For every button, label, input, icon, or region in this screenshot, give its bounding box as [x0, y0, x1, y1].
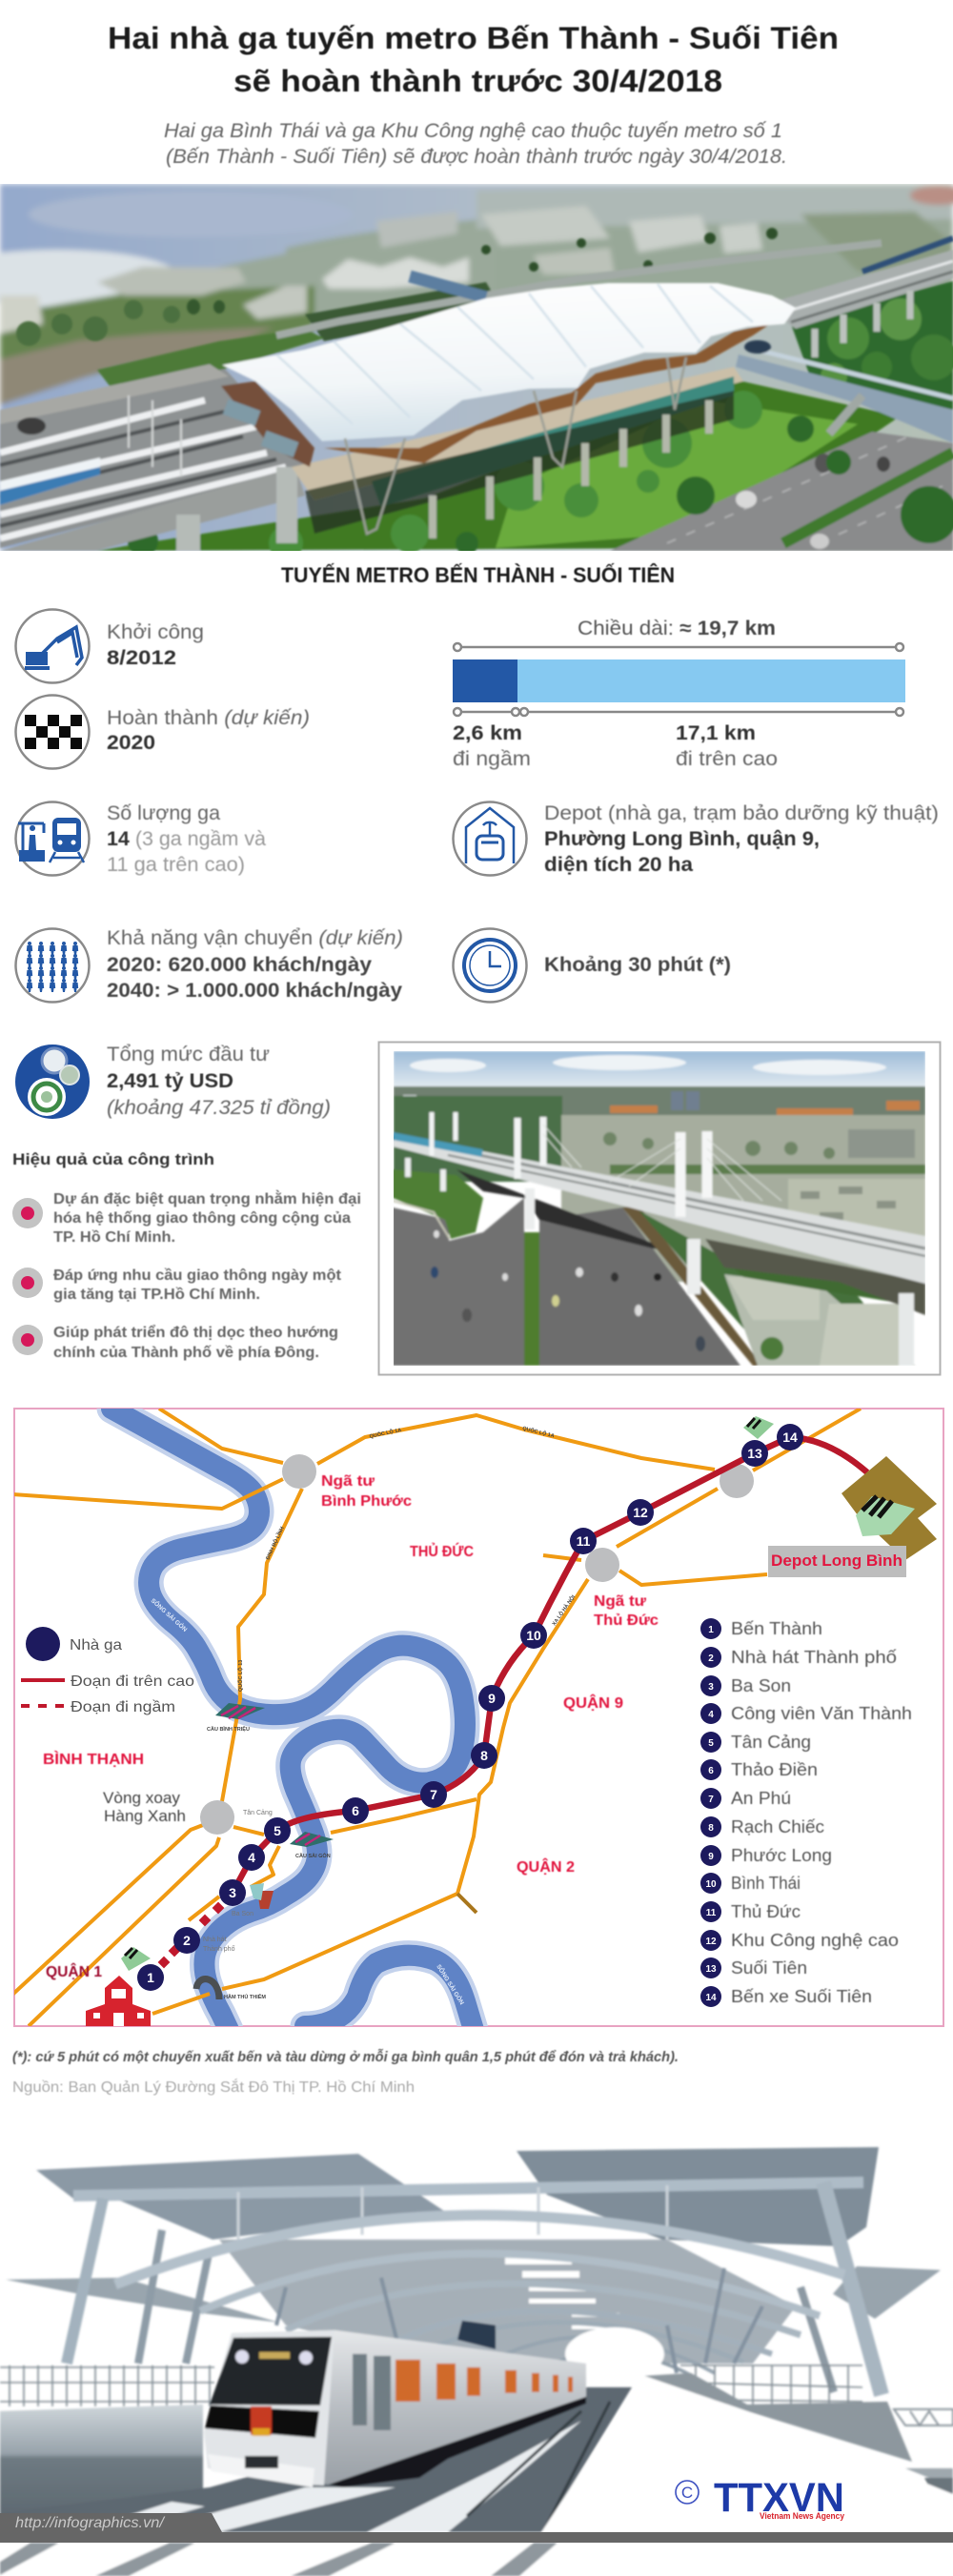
stations: 3: [229, 1885, 236, 1900]
station side labels: Nhà hát: [203, 1937, 227, 1943]
text: start date: 8/2012: [107, 647, 176, 669]
map frame: [14, 1409, 943, 2026]
source url tab: http://infographics.vn/: [15, 2515, 166, 2531]
metro line elevated: [233, 1437, 867, 1893]
station list: 4: [708, 1710, 714, 1720]
label: underground: đi ngầm: [453, 748, 531, 770]
bridge labels: CẦU BÌNH TRIỆU: [207, 1725, 250, 1733]
bridges: [215, 1703, 334, 1847]
text: investment: [107, 1044, 331, 1119]
train side: [310, 2330, 586, 2485]
road name labels: QUỐC LỘ 1A: [522, 1424, 556, 1439]
station list: Bình Thái: [731, 1874, 801, 1893]
station side labels: Tân Cảng: [243, 1810, 273, 1816]
viaduct deck: [393, 1134, 925, 1284]
length bar chart: [453, 618, 905, 770]
benefit 1: [12, 1189, 361, 1246]
label: underground: 2,6 km: [453, 722, 522, 744]
bullet: [12, 1325, 43, 1355]
route map: [12, 1409, 943, 2030]
stations: 6: [352, 1803, 359, 1818]
stations: [137, 1424, 803, 1991]
canopy roof panels: [36, 2154, 444, 2240]
stations: 9: [488, 1691, 496, 1706]
text: capacity: [107, 927, 403, 1002]
station side labels: Ba Son: [232, 1911, 253, 1917]
text: station count: Số lượng ga: [107, 802, 220, 824]
roads: [12, 1409, 861, 2026]
far curved viaduct: [276, 243, 882, 335]
text: start date: Khởi công: [107, 621, 204, 643]
subtitle: Hai ga Bình Thái và ga Khu Công nghệ cao thuộc tuyến metro số 1: [164, 120, 782, 142]
river labels: SÔNG SÀI GÒN: [435, 1962, 467, 2006]
station list: [700, 1618, 912, 2007]
text: depot: Depot (nhà ga, trạm bảo dưỡng kỹ thuật): [544, 802, 939, 824]
text: investment: 2,491 tỷ USD: [107, 1070, 233, 1092]
district and junction labels: THỦ ĐỨC: [410, 1542, 474, 1560]
icon: train near Quận 1: [121, 1947, 151, 1971]
metro line underground: [158, 1902, 224, 1968]
text: gia tăng tại TP.Hồ Chí Minh.: [53, 1287, 260, 1303]
left tracks viaduct: [0, 369, 314, 548]
station list: Bến Thành: [731, 1619, 822, 1638]
stat: total investment: [15, 1044, 331, 1119]
bridge labels: [207, 1725, 331, 2000]
stations: 5: [274, 1823, 281, 1838]
text: completion date: Hoàn thành (dự kiến): [107, 707, 310, 729]
text: capacity: 2020: 620.000 khách/ngày: [107, 954, 372, 976]
river labels: SÔNG SÀI GÒN: [150, 1596, 190, 1633]
photo frame: elevated viaduct over highway: [379, 1043, 940, 1374]
river: Sài Gòn: [112, 1409, 474, 2030]
station list: An Phú: [731, 1789, 791, 1808]
station list: 13: [705, 1964, 717, 1975]
road name labels: [236, 1424, 577, 1692]
station list: 3: [708, 1682, 714, 1693]
station list: 1: [708, 1625, 714, 1635]
road name labels: ĐINH BỘ LĨNH: [264, 1525, 286, 1561]
text: [53, 1189, 361, 1246]
white track streaks: [76, 2421, 581, 2532]
text: [53, 1268, 342, 1303]
source url tab: [0, 2513, 222, 2532]
platform right, white: [541, 2376, 953, 2532]
district and junction labels: QUẬN 1: [46, 1962, 102, 1980]
TTXVN logo: C: [681, 2484, 693, 2502]
section heading: TUYẾN METRO BẾN THÀNH - SUỐI TIÊN: [281, 562, 675, 587]
title: sẽ hoàn thành trước 30/4/2018: [233, 64, 722, 98]
stat: completion: [15, 696, 310, 768]
source: Nguồn: Ban Quản Lý Đường Sắt Đô Thị TP. Hồ Chí Minh: [12, 2078, 415, 2096]
road name labels: QUỐC LỘ 1A: [369, 1426, 402, 1440]
station list: 11: [706, 1908, 717, 1918]
station list: Nhà hát Thành phố: [731, 1648, 897, 1667]
icon: clock: [454, 928, 526, 1003]
text: Đáp ứng nhu cầu giao thông ngày một: [53, 1268, 342, 1284]
title: [108, 21, 839, 98]
district and junction labels: Ngã tư: [321, 1473, 375, 1490]
station list: 6: [708, 1766, 714, 1776]
text: Dự án đặc biệt quan trọng nhằm hiện đại: [53, 1189, 361, 1207]
stations: 2: [183, 1933, 191, 1948]
stations: 14: [782, 1430, 798, 1445]
label: elevated: đi trên cao: [676, 748, 778, 770]
icon: Ba Son shipyard: [250, 1883, 274, 1909]
cars: [431, 1230, 705, 1351]
district and junction labels: Ngã tư: [594, 1593, 646, 1610]
left platform: [0, 2404, 203, 2513]
trees on lawn: [269, 391, 762, 560]
station list: Thảo Điền: [731, 1760, 818, 1779]
icon: train near station 13: [743, 1416, 774, 1439]
depot marker: Depot Long Bình: [771, 1552, 902, 1570]
bullet: [12, 1268, 43, 1298]
district and junction labels: Thủ Đức: [594, 1613, 659, 1629]
label: underground: [453, 722, 531, 770]
highway: [393, 1198, 524, 1366]
TTXVN logo: TTXVN: [714, 2475, 844, 2521]
stat: transport capacity: [15, 927, 403, 1003]
station list: Bến xe Suối Tiên: [731, 1987, 872, 2006]
map legend: Nhà ga: [70, 1637, 122, 1653]
segment brackets: [454, 708, 903, 716]
title: Hai nhà ga tuyến metro Bến Thành - Suối Tiên: [108, 21, 839, 55]
metro train: [0, 456, 101, 492]
district and junction labels: QUẬN 2: [517, 1857, 575, 1876]
footer bar: [0, 2532, 953, 2543]
stations: 7: [430, 1787, 437, 1802]
road bottom right: [610, 432, 953, 551]
arches: [115, 2215, 844, 2284]
text: station count: 11 ga trên cao): [107, 854, 245, 876]
green right trees: [791, 281, 953, 410]
icon: depot: [454, 802, 526, 875]
stations: 4: [248, 1850, 255, 1865]
stat: travel time: [454, 928, 731, 1003]
text: capacity: 2040: > 1.000.000 khách/ngày: [107, 980, 402, 1002]
text: travel time: Khoảng 30 phút (*): [544, 954, 731, 976]
district and junction labels: Vòng xoay: [103, 1789, 180, 1807]
road name labels: QUỐC LỘ 13: [236, 1660, 244, 1692]
text: investment: (khoảng 47.325 tỉ đồng): [107, 1097, 331, 1119]
station list: 10: [705, 1879, 717, 1890]
text: hóa hệ thống giao thông công cộng của: [53, 1210, 351, 1227]
district and junction labels: BÌNH THẠNH: [43, 1750, 144, 1768]
river labels: [150, 1596, 467, 2006]
stations: 11: [577, 1533, 591, 1549]
text: capacity: Khả năng vận chuyển (dự kiến): [107, 927, 403, 949]
station list: 7: [708, 1795, 714, 1805]
bridge labels: CẦU SÀI GÒN: [295, 1852, 331, 1859]
text: station count: [107, 802, 266, 876]
subtitle: [164, 120, 787, 168]
subtitle: (Bến Thành - Suối Tiên) sẽ được hoàn thành trước ngày 30/4/2018.: [166, 146, 787, 168]
station side labels: [203, 1810, 273, 1953]
station list: Thủ Đức: [731, 1902, 801, 1921]
map legend: Đoạn đi trên cao: [71, 1673, 194, 1690]
station list: Khu Công nghệ cao: [731, 1931, 899, 1950]
stat: depot: [454, 802, 939, 876]
upper right viaduct: [762, 250, 953, 329]
towers: [432, 1112, 456, 1156]
roof supports: [345, 357, 686, 534]
stations: 12: [633, 1505, 648, 1520]
icon: checkered flag: [15, 696, 90, 768]
label: total length: Chiều dài: ≈ 19,7 km: [578, 618, 776, 639]
white roof: [222, 283, 796, 441]
bottom image: station canopy with train: [0, 2147, 953, 2576]
text: chính của Thành phố về phía Đông.: [53, 1345, 319, 1361]
label: elevated: [676, 722, 778, 770]
bullet: [12, 1198, 43, 1228]
district and junction labels: Bình Phước: [321, 1493, 412, 1510]
roundabouts: [200, 1454, 754, 1835]
benefit 2: [12, 1268, 342, 1303]
icon: train and station: [15, 802, 90, 875]
station list: 2: [708, 1653, 714, 1664]
benefits heading: Hiệu quả của công trình: [12, 1150, 214, 1168]
road name labels: XA LỘ HÀ NỘI: [550, 1593, 577, 1627]
bottom white with rails: [0, 2543, 953, 2576]
hero image: elevated station with white membrane roof: [0, 184, 953, 560]
wooden eaves: [324, 324, 770, 463]
under-canopy ribs: [219, 2240, 796, 2363]
text: investment: Tổng mức đầu tư: [107, 1044, 270, 1065]
footnote: (*): cứ 5 phút có một chuyến xuất bến và tàu dừng ở mỗi ga bình quân 1,5 phút để đón và trả khách).: [12, 2049, 679, 2065]
text: Giúp phát triển đô thị dọc theo hướng: [53, 1324, 338, 1341]
station list: 9: [708, 1852, 714, 1862]
station list: 14: [705, 1993, 717, 2003]
text: depot: [544, 802, 939, 876]
district and junction labels: Hàng Xanh: [104, 1807, 186, 1825]
text: completion date: 2020: [107, 732, 155, 754]
pedestrian bridge back: [410, 276, 486, 297]
text: depot: Phường Long Bình, quận 9,: [544, 828, 820, 850]
station side labels: Thành phố: [203, 1944, 235, 1953]
station list: 12: [705, 1937, 717, 1947]
icon: coins: [15, 1045, 90, 1119]
district and junction labels: [43, 1473, 659, 1980]
train front: [204, 2330, 335, 2485]
railings: [0, 2365, 862, 2406]
tunnel arch: [196, 1979, 219, 1999]
icon: excavator: [15, 610, 90, 682]
stations: 13: [747, 1446, 762, 1461]
text: start date: [107, 621, 204, 669]
station list: 8: [708, 1823, 714, 1834]
station list: 5: [708, 1738, 714, 1749]
station list: Suối Tiên: [731, 1958, 807, 1978]
benefit 3: [12, 1324, 338, 1361]
map legend: [21, 1627, 194, 1715]
map legend: Đoạn đi ngầm: [71, 1699, 175, 1715]
stat: start of construction: [15, 610, 204, 682]
front pedestrian bridge: [736, 355, 953, 443]
grass: [95, 378, 900, 551]
stations: 10: [526, 1628, 541, 1643]
station list: Ba Son: [731, 1676, 791, 1695]
station list: Rạch Chiếc: [731, 1817, 824, 1836]
depot marker: [768, 1456, 937, 1577]
station list: Tân Cảng: [731, 1733, 811, 1752]
track bed: [0, 2387, 632, 2532]
right side of station: [644, 2373, 912, 2462]
TTXVN logo: Vietnam News Agency: [760, 2511, 844, 2521]
label: elevated: 17,1 km: [676, 722, 756, 744]
station list: Công viên Văn Thành: [731, 1704, 912, 1723]
district and junction labels: QUẬN 9: [563, 1694, 623, 1712]
station list: Phước Long: [731, 1846, 832, 1865]
beams and columns: [73, 2182, 863, 2196]
text: TP. Hồ Chí Minh.: [53, 1229, 175, 1246]
text: [53, 1324, 338, 1361]
text: completion date: [107, 707, 310, 754]
stat: number of stations: [15, 802, 266, 876]
bridge labels: HẦM THỦ THIÊM: [224, 1993, 266, 2000]
stations: 1: [147, 1970, 154, 1985]
bar: elevated segment: [517, 659, 905, 702]
stations: 8: [480, 1748, 488, 1763]
icon: passengers grid: [15, 928, 90, 1003]
icon: Bến Thành market: [86, 1976, 151, 2027]
total length bracket: [454, 643, 903, 651]
bar: underground segment: [453, 659, 517, 702]
text: depot: diện tích 20 ha: [544, 854, 693, 876]
station body: [292, 367, 743, 500]
text: station count: 14 (3 ga ngầm và: [107, 828, 266, 850]
